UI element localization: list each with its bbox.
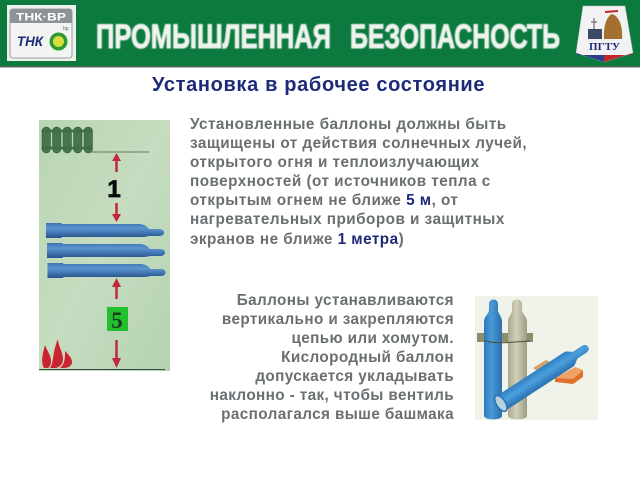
grey cylinder [508, 300, 527, 419]
text block: cylinder mounting: допускается укладывать [255, 368, 454, 385]
text block: protection requirements: открытого огня и теплоизлучающих [190, 154, 480, 171]
text block: protection requirements: открытым огнем не ближе 5 м, от [190, 192, 458, 209]
label: 5: 5 [111, 308, 123, 333]
label: 5 [107, 307, 128, 333]
bracket [477, 333, 533, 342]
text block: cylinder mounting: вертикально и закрепляются [222, 311, 454, 328]
text block: protection requirements: экранов не ближе 1 метра) [190, 231, 404, 248]
text block: protection requirements: защищены от действия солнечных лучей, [190, 135, 527, 152]
text block: protection requirements: поверхностей (от источников тепла с [190, 173, 491, 190]
text block: cylinder mounting: Кислородный баллон [281, 349, 454, 366]
text block: cylinder mounting: цепью или хомутом. [291, 330, 454, 347]
logo: TNK-BP: ТНК [17, 33, 44, 49]
title: Установка в рабочее состояние [152, 74, 485, 96]
brick [533, 360, 555, 374]
logo: PGTU shield [576, 6, 633, 62]
logo: TNK-BP: ТНК·ВР [16, 12, 66, 24]
header title [96, 18, 560, 56]
text block: cylinder mounting: Баллоны устанавливаются [237, 292, 454, 308]
text block: protection requirements: нагревательных приборов и защитных [190, 211, 505, 228]
logo: PGTU shield: ПГТУ [589, 42, 621, 53]
text block: protection requirements: Установленные баллоны должны быть [190, 116, 507, 133]
header banner [0, 0, 640, 68]
logo: TNK-BP: bp [63, 26, 69, 32]
arrows: 5 metre distance [112, 278, 121, 368]
text block: cylinder mounting: располагался выше башмака [221, 406, 454, 423]
blue cylinder [484, 300, 502, 419]
text block: cylinder mounting: наклонно - так, чтобы вентиль [210, 387, 454, 404]
text block: cylinder mounting [210, 292, 454, 423]
icon: radiator [42, 127, 92, 153]
header title: БЕЗОПАСНОСТЬ [350, 18, 560, 56]
arrows: 1 metre distance [112, 153, 121, 222]
header title: ПРОМЫШЛЕННАЯ [96, 18, 331, 56]
icon: flames [42, 339, 72, 368]
cylinders [46, 223, 166, 278]
label: 1: 1 [107, 176, 121, 203]
text block: protection requirements [190, 116, 527, 248]
logo: TNK-BP [7, 5, 76, 61]
leaning cylinder [492, 339, 593, 413]
